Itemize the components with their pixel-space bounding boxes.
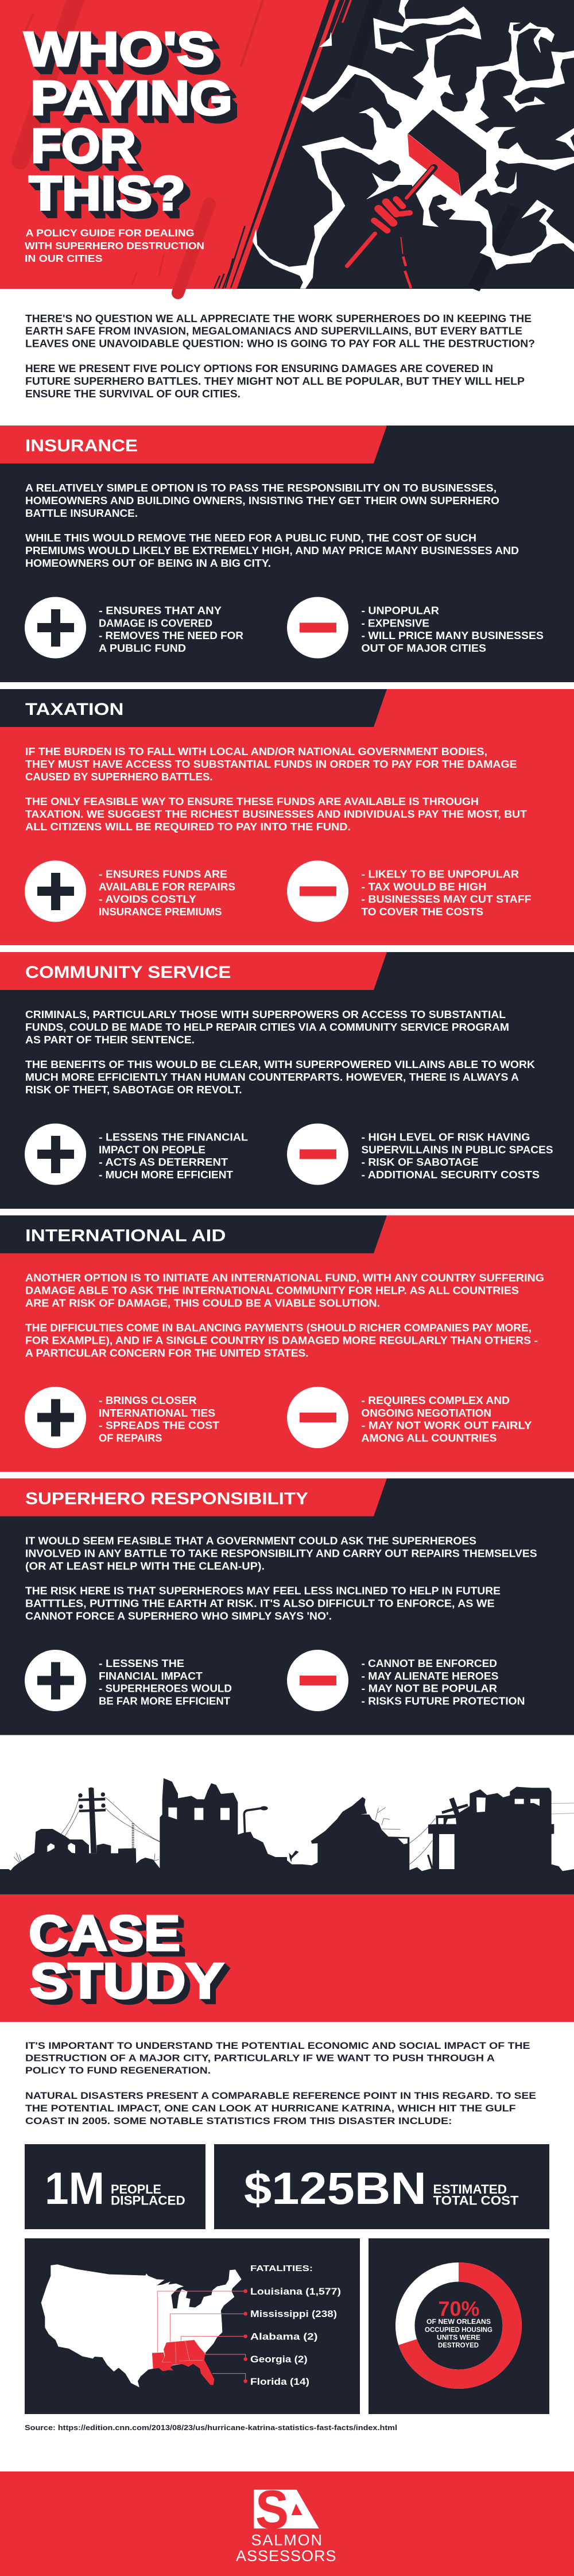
stat: 70 percent text: 70% xyxy=(439,2297,480,2320)
text: international aid description: THE DIFFICULTIES COME IN BALANCING PAYMENTS (SHOULD RICHER COMPANIES PAY MORE, xyxy=(25,1322,532,1333)
list: cons: - EXPENSIVE xyxy=(362,618,429,629)
title xyxy=(24,22,232,221)
panel: international aid xyxy=(0,1215,574,1472)
heading: case study: STUDY xyxy=(30,1954,224,2009)
list: cons: - BUSINESSES MAY CUT STAFF xyxy=(362,894,532,905)
text: international aid description: ANOTHER OPTION IS TO INITIATE AN INTERNATIONAL FUND, WITH ANY COUNTRY SUFFERING xyxy=(25,1272,544,1284)
list: fatalities: Mississippi (238) xyxy=(250,2308,337,2319)
text: case study intro: DESTRUCTION OF A MAJOR CITY, PARTICULARLY IF WE WANT TO PUSH THROUGH A xyxy=(25,2052,495,2064)
text: international aid description: DAMAGE ABLE TO ASK THE INTERNATIONAL COMMUNITY FOR HELP. AS ALL COUNTRIES xyxy=(25,1285,519,1297)
list: pros xyxy=(99,1658,232,1707)
text: insurance description: WHILE THIS WOULD REMOVE THE NEED FOR A PUBLIC FUND, THE COST OF SUCH xyxy=(25,532,476,544)
heading: community service: COMMUNITY SERVICE xyxy=(25,963,231,982)
text: taxation description: ALL CITIZENS WILL BE REQUIRED TO PAY INTO THE FUND. xyxy=(25,821,351,833)
panel: housing donut chart xyxy=(369,2238,549,2414)
intro text: ENSURE THE SURVIVAL OF OUR CITIES. xyxy=(25,388,241,400)
list: cons: TO COVER THE COSTS xyxy=(362,906,483,918)
stat: people displaced: DISPLACED xyxy=(111,2194,185,2207)
heading: case study: CASE xyxy=(29,1905,180,1962)
list: cons: - UNPOPULAR xyxy=(362,605,439,617)
icon: hammer handle and fist xyxy=(347,168,434,288)
list: cons: - TAX WOULD BE HIGH xyxy=(362,881,487,892)
logo: company name: ASSESSORS xyxy=(236,2547,336,2565)
donut chart: 70 percent xyxy=(405,2272,512,2379)
text: international aid description: ARE AT RISK OF DAMAGE, THIS COULD BE A VIABLE SOLUTION. xyxy=(25,1298,380,1309)
icon: hammer head xyxy=(408,110,486,196)
logo: company name xyxy=(236,2531,336,2565)
icon: minus xyxy=(287,597,348,658)
list: pros xyxy=(99,605,243,654)
subtitle: IN OUR CITIES xyxy=(25,253,102,264)
list: cons: - MAY NOT WORK OUT FAIRLY xyxy=(362,1419,532,1431)
intro text xyxy=(25,313,535,400)
heading: community service xyxy=(0,952,387,990)
panel: insurance xyxy=(0,426,574,682)
list: cons: - LIKELY TO BE UNPOPULAR xyxy=(362,868,519,880)
list: pros xyxy=(99,1131,248,1181)
list: pros: - LESSENS THE FINANCIAL xyxy=(99,1131,248,1143)
title: THIS? xyxy=(29,167,185,221)
list: fatalities: Georgia (2) xyxy=(250,2354,308,2365)
stat: 70 percent text: OF NEW ORLEANS xyxy=(426,2319,491,2326)
intro text: THERE'S NO QUESTION WE ALL APPRECIATE THE WORK SUPERHEROES DO IN KEEPING THE xyxy=(25,313,532,324)
list: fatalities: FATALITIES: xyxy=(250,2264,313,2273)
stat: estimated total cost: $125BN xyxy=(244,2163,426,2214)
stat: people displaced: PEOPLE xyxy=(111,2182,161,2196)
text: insurance description: HOMEOWNERS AND BUILDING OWNERS, INSISTING THEY GET THEIR OWN SUPERHERO xyxy=(25,495,499,506)
list: pros: DAMAGE IS COVERED xyxy=(99,618,212,629)
connector lines xyxy=(157,2291,246,2379)
list: pros: IMPACT ON PEOPLE xyxy=(99,1144,205,1155)
heading: international aid xyxy=(0,1215,387,1253)
heading: taxation xyxy=(0,689,387,727)
title: PAYING xyxy=(30,71,232,125)
list: cons xyxy=(362,1658,525,1707)
icon: minus xyxy=(287,1387,348,1448)
icon: plus xyxy=(25,1650,86,1711)
text: superhero responsibility description: IT WOULD SEEM FEASIBLE THAT A GOVERNMENT COULD ASK THE SUPERHEROES xyxy=(25,1535,476,1547)
list: pros: - MUCH MORE EFFICIENT xyxy=(99,1169,233,1181)
list: cons: - RISK OF SABOTAGE xyxy=(362,1157,479,1168)
text: community service description xyxy=(25,1009,535,1096)
list: cons xyxy=(362,868,532,918)
list: pros: BE FAR MORE EFFICIENT xyxy=(99,1695,230,1707)
logo: SA mark: S xyxy=(256,2480,288,2539)
text: case study intro xyxy=(25,2040,536,2126)
panel: fatalities map xyxy=(25,2238,360,2414)
intro text: EARTH SAFE FROM INVASION, MEGALOMANIACS AND SUPERVILLAINS, BUT EVERY BATTLE xyxy=(25,326,522,337)
stat: estimated total cost xyxy=(214,2144,549,2229)
list: pros: INTERNATIONAL TIES xyxy=(99,1407,215,1419)
text: superhero responsibility description: CANNOT FORCE A SUPERHERO WHO SIMPLY SAYS 'NO'. xyxy=(25,1610,332,1622)
text: taxation description: THE ONLY FEASIBLE WAY TO ENSURE THESE FUNDS ARE AVAILABLE IS THROUGH xyxy=(25,796,479,807)
stat: estimated total cost: ESTIMATED xyxy=(433,2182,507,2196)
list: pros: FINANCIAL IMPACT xyxy=(99,1670,203,1682)
list: pros: - LESSENS THE xyxy=(99,1658,184,1669)
text: insurance description xyxy=(25,482,519,569)
panel: taxation xyxy=(0,689,574,945)
list: cons: - MAY NOT BE POPULAR xyxy=(362,1682,497,1694)
list: pros: - ENSURES FUNDS ARE xyxy=(99,868,227,880)
list: cons: - MAY ALIENATE HEROES xyxy=(362,1670,498,1682)
list: cons xyxy=(362,605,544,654)
list: cons xyxy=(362,1131,553,1181)
text: case study intro: COAST IN 2005. SOME NOTABLE STATISTICS FROM THIS DISASTER INCLUDE: xyxy=(25,2115,452,2126)
text: superhero responsibility description xyxy=(25,1535,537,1622)
list: fatalities: Florida (14) xyxy=(250,2376,309,2387)
text: community service description: MUCH MORE EFFICIENTLY THAN HUMAN COUNTERPARTS. HOWEVER, THERE IS ALWAYS A xyxy=(25,1072,519,1083)
intro text: LEAVES ONE UNAVOIDABLE QUESTION: WHO IS GOING TO PAY FOR ALL THE DESTRUCTION? xyxy=(25,338,535,349)
title: FOR xyxy=(31,119,136,173)
list: cons: - HIGH LEVEL OF RISK HAVING xyxy=(362,1131,530,1143)
illustration: hammer strike artwork xyxy=(219,0,574,289)
list: pros: - BRINGS CLOSER xyxy=(99,1395,196,1406)
subtitle: WITH SUPERHERO DESTRUCTION xyxy=(25,240,204,252)
list: pros xyxy=(99,1395,219,1444)
text: superhero responsibility description: INVOLVED IN ANY BATTLE TO TAKE RESPONSIBILITY AND CARRY OUT REPAIRS THEMSELVES xyxy=(25,1548,537,1560)
list: cons: OUT OF MAJOR CITIES xyxy=(362,643,486,654)
list: fatalities xyxy=(250,2264,341,2387)
icon: minus xyxy=(287,860,348,922)
list: pros: OF REPAIRS xyxy=(99,1432,162,1444)
text: insurance description: HOMEOWNERS OUT OF BEING IN A BIG CITY. xyxy=(25,558,271,569)
subtitle xyxy=(25,227,204,264)
icon: plus xyxy=(25,860,86,922)
icon: minus xyxy=(287,1123,348,1185)
icon: minus xyxy=(287,1650,348,1711)
footer xyxy=(0,2471,574,2576)
list: pros: - SPREADS THE COST xyxy=(99,1419,219,1431)
text: taxation description: CAUSED BY SUPERHERO BATTLES. xyxy=(25,771,212,783)
text: superhero responsibility description: THE RISK HERE IS THAT SUPERHEROES MAY FEEL LESS INCLINED TO HELP IN FUTURE xyxy=(25,1585,501,1596)
text: international aid description xyxy=(25,1272,544,1359)
logo: SA mark xyxy=(254,2480,319,2539)
icon: plus xyxy=(25,1387,86,1448)
map: United States xyxy=(41,2264,247,2387)
text: case study intro: IT'S IMPORTANT TO UNDERSTAND THE POTENTIAL ECONOMIC AND SOCIAL IMPACT OF THE xyxy=(25,2040,530,2051)
text: insurance description: BATTLE INSURANCE. xyxy=(25,508,138,519)
stat: people displaced xyxy=(25,2144,205,2229)
text: taxation description: IF THE BURDEN IS TO FALL WITH LOCAL AND/OR NATIONAL GOVERNMENT BODIES, xyxy=(25,746,487,757)
text: international aid description: FOR EXAMPLE), AND IF A SINGLE COUNTRY IS DAMAGED MORE REGULARLY THAN OTHERS - xyxy=(25,1335,538,1346)
list: pros: - SUPERHEROES WOULD xyxy=(99,1682,232,1694)
text: case study intro: POLICY TO FUND REGENERATION. xyxy=(25,2065,211,2076)
text: insurance description: A RELATIVELY SIMPLE OPTION IS TO PASS THE RESPONSIBILITY ON TO BUSINESSES, xyxy=(25,482,497,494)
panel: case study banner xyxy=(0,1894,574,2022)
list: cons: - RISKS FUTURE PROTECTION xyxy=(362,1695,525,1707)
list: fatalities: Alabama (2) xyxy=(250,2331,318,2342)
list: pros: - AVOIDS COSTLY xyxy=(99,894,196,905)
list: cons: AMONG ALL COUNTRIES xyxy=(362,1432,497,1444)
stat: 70 percent text xyxy=(425,2297,492,2349)
text: community service description: THE BENEFITS OF THIS WOULD BE CLEAR, WITH SUPERPOWERED VILLAINS ABLE TO WORK xyxy=(25,1059,535,1070)
text: case study intro: NATURAL DISASTERS PRESENT A COMPARABLE REFERENCE POINT IN THIS REGARD. TO SEE xyxy=(25,2090,536,2101)
title: WHO'S xyxy=(24,22,215,76)
text: community service description: AS PART OF THEIR SENTENCE. xyxy=(25,1034,195,1046)
heading: international aid: INTERNATIONAL AID xyxy=(25,1227,226,1245)
list: pros: - ACTS AS DETERRENT xyxy=(99,1157,228,1168)
intro text: HERE WE PRESENT FIVE POLICY OPTIONS FOR ENSURING DAMAGES ARE COVERED IN xyxy=(25,363,493,374)
heading: superhero responsibility: SUPERHERO RESPONSIBILITY xyxy=(25,1490,308,1508)
text: community service description: FUNDS, COULD BE MADE TO HELP REPAIR CITIES VIA A COMMUNITY SERVICE PROGRAM xyxy=(25,1022,509,1033)
list: cons: ONGOING NEGOTIATION xyxy=(362,1407,491,1419)
list: pros: - ENSURES THAT ANY xyxy=(99,605,222,617)
stat: people displaced: 1M xyxy=(45,2163,104,2214)
text: superhero responsibility description: BATTTLES, PUTTING THE EARTH AT RISK. IT'S ALSO DIFFICULT TO ENFORCE, AS WE xyxy=(25,1598,495,1609)
heading: taxation: TAXATION xyxy=(25,700,124,719)
illustration: ruined skyline xyxy=(0,1778,574,1895)
text: community service description: CRIMINALS, PARTICULARLY THOSE WITH SUPERPOWERS OR ACCESS TO SUBSTANTIAL xyxy=(25,1009,506,1020)
text: case study intro: THE POTENTIAL IMPACT, ONE CAN LOOK AT HURRICANE KATRINA, WHICH HIT THE GULF xyxy=(25,2103,516,2114)
subtitle: A POLICY GUIDE FOR DEALING xyxy=(26,227,195,239)
heading: case study xyxy=(29,1905,224,2009)
text: international aid description: A PARTICULAR CONCERN FOR THE UNITED STATES. xyxy=(25,1347,309,1359)
heading: superhero responsibility xyxy=(0,1478,387,1516)
list: cons: - REQUIRES COMPLEX AND xyxy=(362,1395,510,1406)
list: pros: AVAILABLE FOR REPAIRS xyxy=(99,881,235,892)
list: cons: - WILL PRICE MANY BUSINESSES xyxy=(362,630,544,641)
icon: plus xyxy=(25,597,86,658)
logo: company name: SALMON xyxy=(251,2531,322,2548)
text: superhero responsibility description: (OR AT LEAST HELP WITH THE CLEAN-UP). xyxy=(25,1561,265,1572)
text: taxation description xyxy=(25,746,527,833)
list: cons: SUPERVILLAINS IN PUBLIC SPACES xyxy=(362,1144,553,1155)
list: pros: A PUBLIC FUND xyxy=(99,643,186,654)
icon: plus xyxy=(25,1123,86,1185)
list: fatalities: Louisiana (1,577) xyxy=(250,2286,341,2297)
text: community service description: RISK OF THEFT, SABOTAGE OR REVOLT. xyxy=(25,1084,242,1096)
list: cons: - CANNOT BE ENFORCED xyxy=(362,1658,497,1669)
heading: insurance: INSURANCE xyxy=(25,436,138,455)
intro text: FUTURE SUPERHERO BATTLES. THEY MIGHT NOT ALL BE POPULAR, BUT THEY WILL HELP xyxy=(25,376,525,387)
list: pros: - REMOVES THE NEED FOR xyxy=(99,630,243,641)
text: taxation description: THEY MUST HAVE ACCESS TO SUBSTANTIAL FUNDS IN ORDER TO PAY FOR THE DAMAGE xyxy=(25,759,517,770)
panel: hero xyxy=(0,0,574,293)
stat: 70 percent text: OCCUPIED HOUSING xyxy=(425,2327,492,2334)
panel: community service xyxy=(0,952,574,1209)
text: insurance description: PREMIUMS WOULD LIKELY BE EXTREMELY HIGH, AND MAY PRICE MANY BUSINESSES AND xyxy=(25,545,519,556)
list: cons: - ADDITIONAL SECURITY COSTS xyxy=(362,1169,540,1181)
list: cons xyxy=(362,1395,532,1444)
list: pros xyxy=(99,868,235,918)
panel: superhero responsibility xyxy=(0,1478,574,1735)
source note: Source: https://edition.cnn.com/2013/08/23/us/hurricane-katrina-statistics-fast-facts/index.html xyxy=(25,2424,397,2432)
text: taxation description: TAXATION. WE SUGGEST THE RICHEST BUSINESSES AND INDIVIDUALS PAY THE MOST, BUT xyxy=(25,809,527,820)
list: pros: INSURANCE PREMIUMS xyxy=(99,906,222,918)
stat: estimated total cost: TOTAL COST xyxy=(433,2194,519,2207)
heading: insurance xyxy=(0,426,387,463)
stat: 70 percent text: UNITS WERE xyxy=(437,2335,480,2342)
stat: 70 percent text: DESTROYED xyxy=(438,2342,479,2349)
